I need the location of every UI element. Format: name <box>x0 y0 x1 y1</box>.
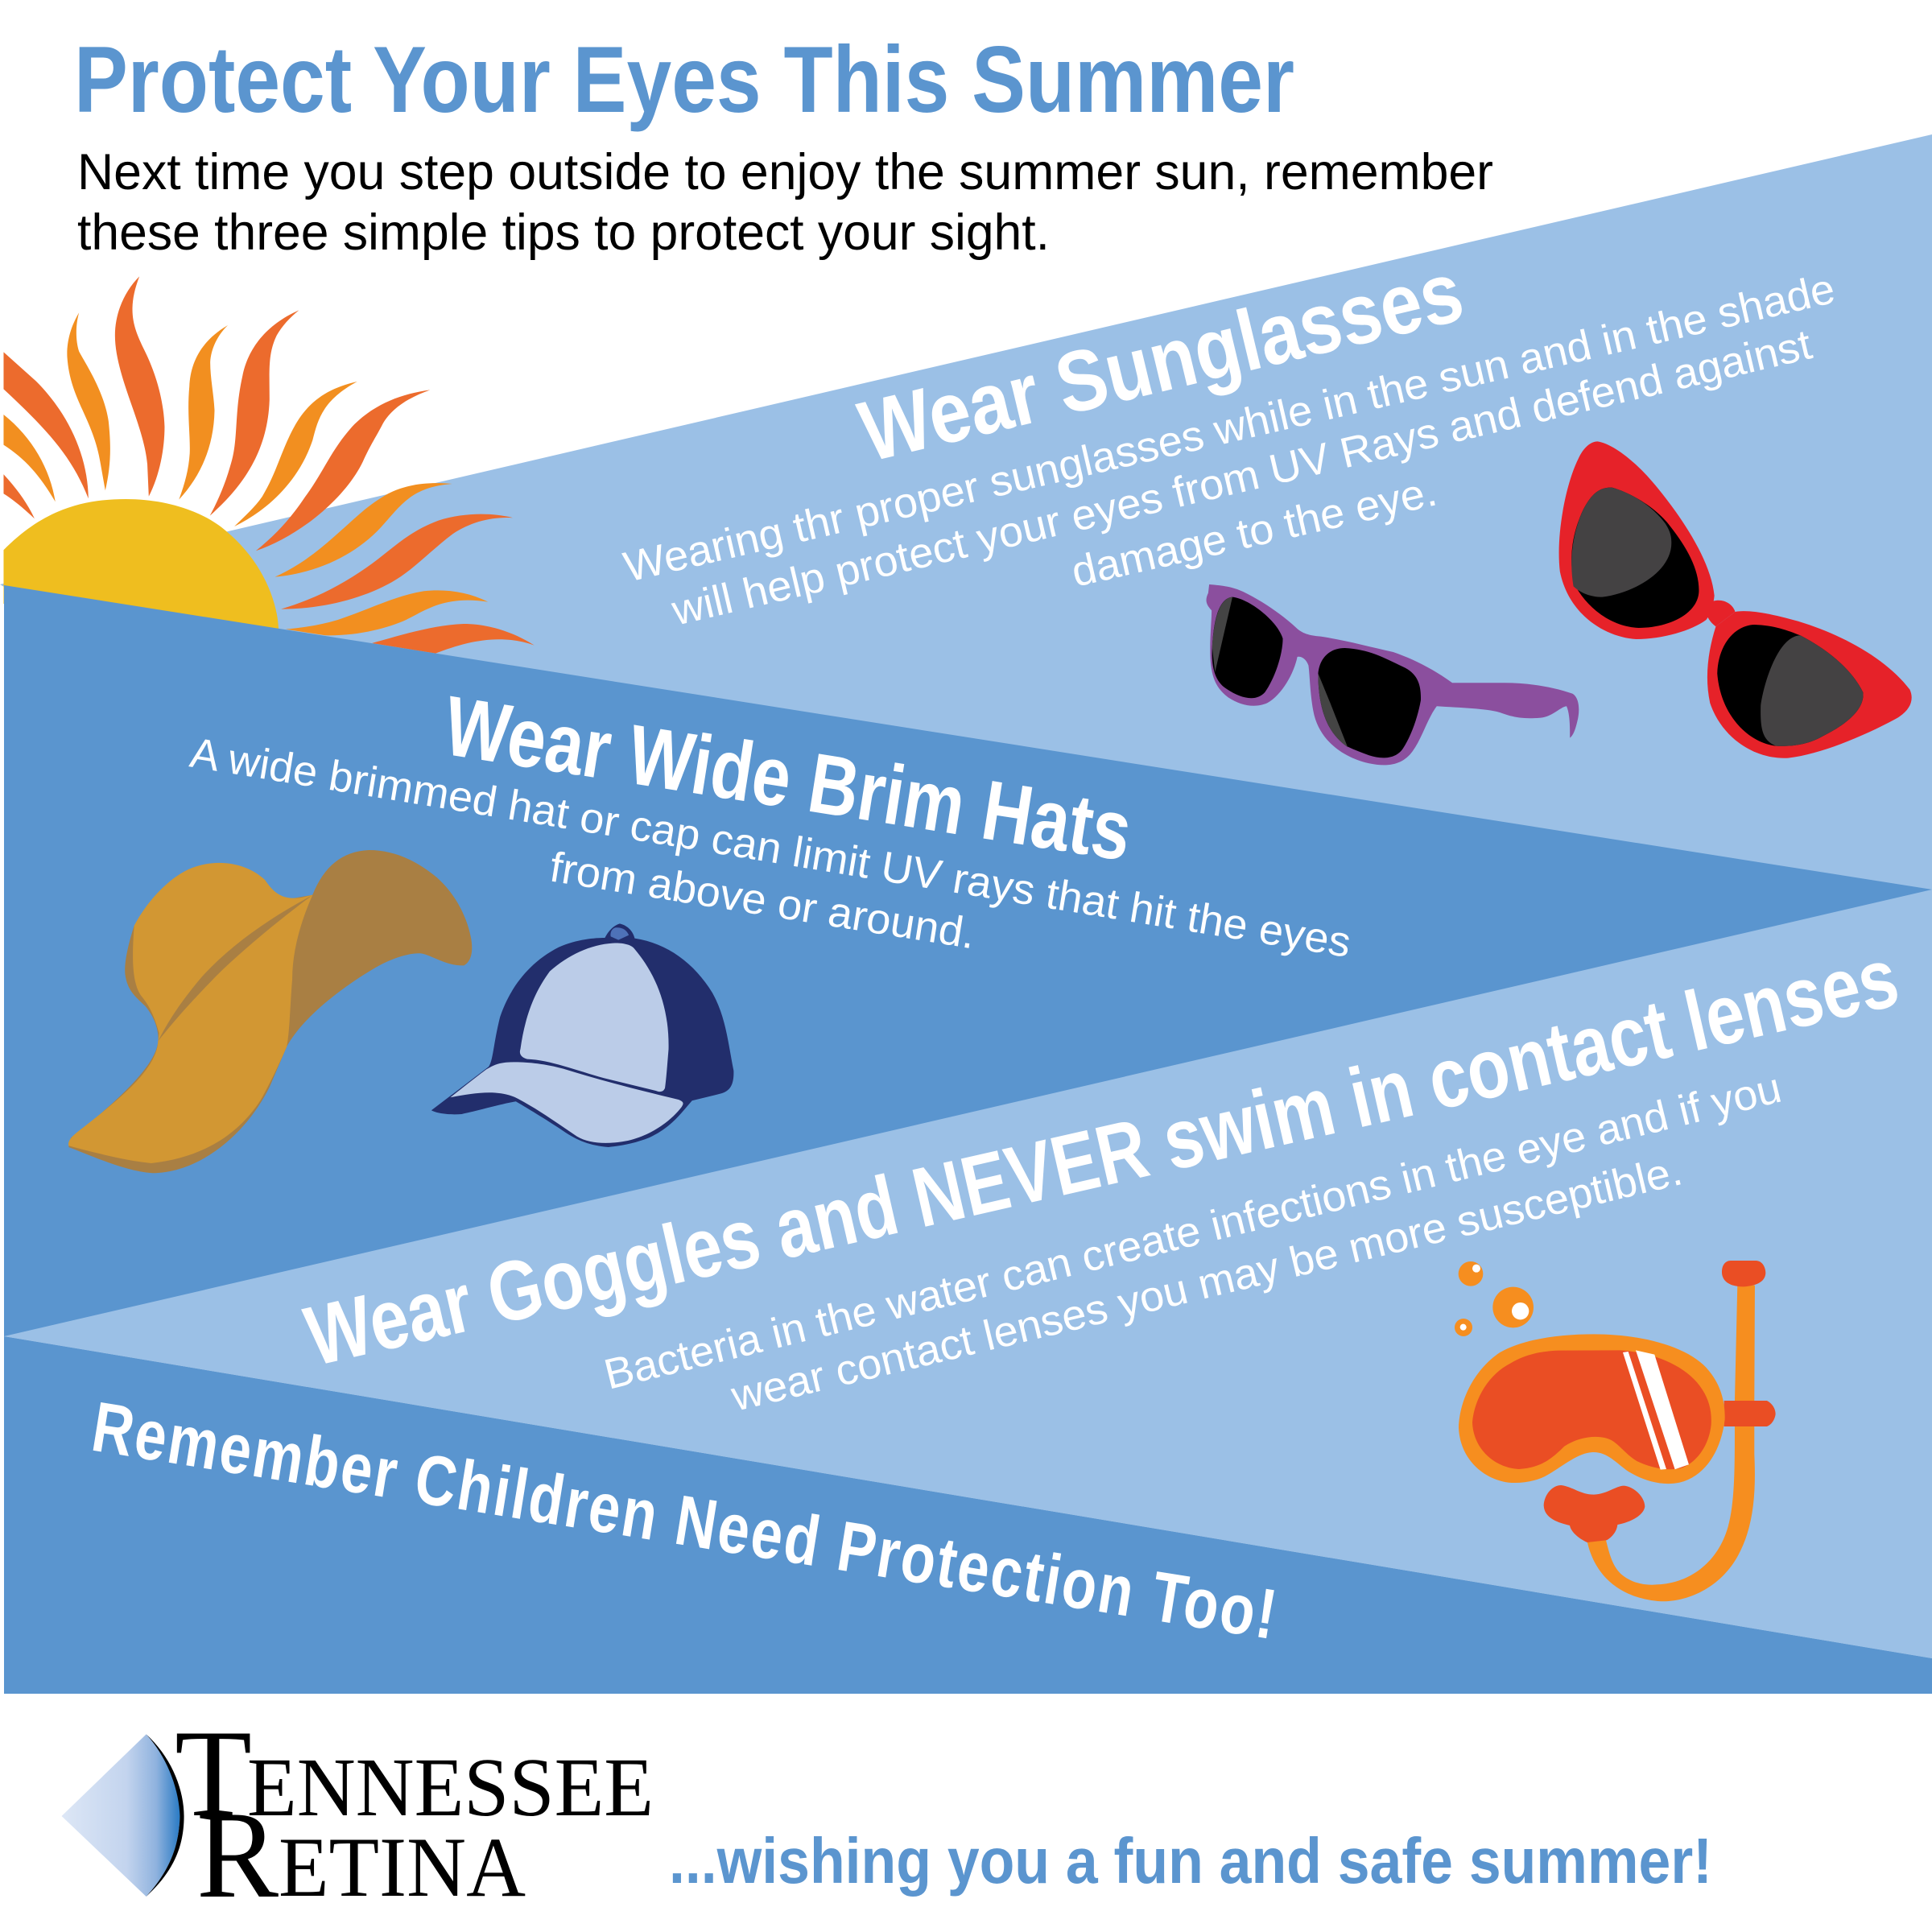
heading: remember children: Remember Children Need Protection Too! <box>87 1386 1284 1654</box>
intro text <box>77 144 1493 261</box>
text: hats tip: A wide brimmed hat or cap can limit UV rays that hit the eyes <box>187 729 1354 967</box>
text: sunglasses tip: will help protect your eyes from UV Rays and defend against <box>667 320 1816 635</box>
logo: tennessee retina <box>62 1704 654 1924</box>
logo wordmark <box>175 1704 654 1924</box>
logo mark <box>62 1734 184 1897</box>
panel: children band <box>4 1336 1932 1694</box>
icon: wide brim hat <box>68 850 472 1173</box>
logo wordmark: R <box>196 1785 279 1924</box>
text: sunglasses tip: Wearing thr proper sunglasses while in the sun and in the shade <box>619 265 1839 592</box>
panel: hats band <box>4 585 1932 1336</box>
icon: sun <box>3 276 535 654</box>
logo wordmark: T <box>175 1704 252 1843</box>
title: Protect Your Eyes This Summer <box>74 27 1294 132</box>
text: goggles tip: wear contact lenses you may be more susceptible. <box>726 1146 1686 1421</box>
text: sunglasses tip: damage to the eye. <box>1067 468 1441 597</box>
logo wordmark: ENNESSEE <box>247 1741 654 1834</box>
text: goggles tip: Bacteria in the water can create infections in the eye and if you <box>600 1064 1785 1399</box>
icon: purple sunglasses <box>1207 584 1579 765</box>
heading: wear sunglasses: Wear Sunglasses <box>850 242 1472 480</box>
icon: red sunglasses <box>1559 441 1912 758</box>
intro text: these three simple tips to protect your sight. <box>77 204 1050 261</box>
icon: snorkel mask <box>1455 1261 1776 1601</box>
heading: wear wide brim hats: Wear Wide Brim Hats <box>438 679 1137 879</box>
logo wordmark: ETINA <box>279 1820 526 1914</box>
footer tagline: ...wishing you a fun and safe summer! <box>669 1825 1712 1897</box>
panel: sunglasses band <box>0 134 1932 1658</box>
text: hats tip: from above or around. <box>547 844 979 958</box>
intro text: Next time you step outside to enjoy the summer sun, remember <box>77 144 1493 200</box>
icon: baseball cap <box>431 923 733 1147</box>
